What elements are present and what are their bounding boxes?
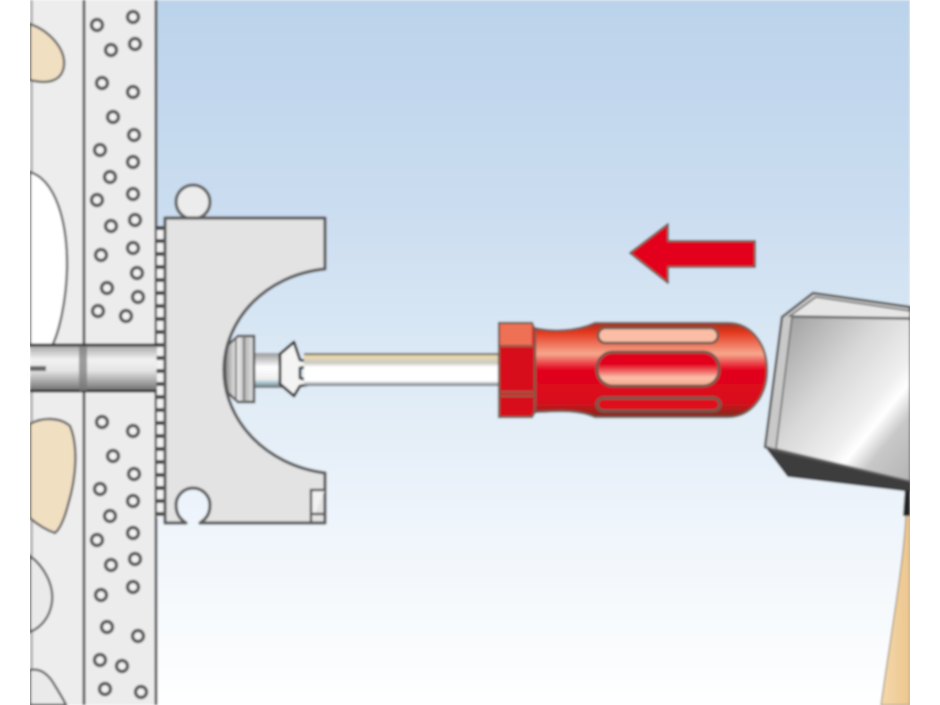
handle hex collar — [499, 323, 535, 417]
screw head and washer — [225, 336, 307, 402]
collar highlight — [500, 324, 532, 345]
hammer handle — [881, 515, 910, 705]
wall cross-section — [30, 0, 156, 705]
wall plaster layer — [84, 0, 156, 705]
washer ribs — [236, 336, 244, 402]
red direction arrow — [630, 224, 755, 283]
cavity: white — [30, 172, 67, 346]
corner notch — [311, 490, 325, 523]
strip fill — [157, 226, 165, 518]
handle collar — [903, 488, 910, 516]
stone: top tan — [30, 24, 64, 82]
bottom grip — [597, 398, 720, 411]
anchor sleeve in wall — [30, 345, 165, 391]
washer — [225, 336, 254, 402]
sleeve bottom edge — [30, 390, 165, 392]
wall inner layer — [30, 0, 84, 705]
stone: grey outline — [30, 556, 52, 632]
middle grip — [597, 352, 719, 386]
wall divider line — [82, 0, 86, 705]
collar bands — [500, 346, 534, 396]
hammer top bevel — [790, 297, 910, 318]
sleeve joint — [79, 346, 87, 391]
wall left edge shading — [30, 0, 33, 705]
stone: bottom outline — [30, 670, 66, 705]
perforated flange strip — [157, 226, 165, 518]
hammer side bevel — [765, 293, 910, 481]
wall right edge — [154, 0, 158, 705]
bit head — [280, 342, 307, 396]
sleeve top edge — [30, 344, 165, 346]
screwdriver — [499, 323, 767, 417]
top loop — [176, 185, 210, 219]
stone: lower tan — [30, 419, 75, 533]
handle body — [534, 323, 767, 417]
top grip — [598, 328, 718, 343]
sleeve body — [30, 346, 160, 391]
aggregate pebbles — [92, 12, 146, 698]
strip ticks — [156, 226, 166, 518]
cable clip — [165, 185, 325, 523]
screw tip — [30, 366, 46, 371]
hammer underside — [766, 447, 910, 491]
hammer face — [776, 317, 910, 481]
screwdriver shaft — [304, 353, 498, 386]
shaft neck — [254, 353, 286, 388]
clip body — [165, 218, 325, 523]
hammer — [765, 293, 910, 705]
